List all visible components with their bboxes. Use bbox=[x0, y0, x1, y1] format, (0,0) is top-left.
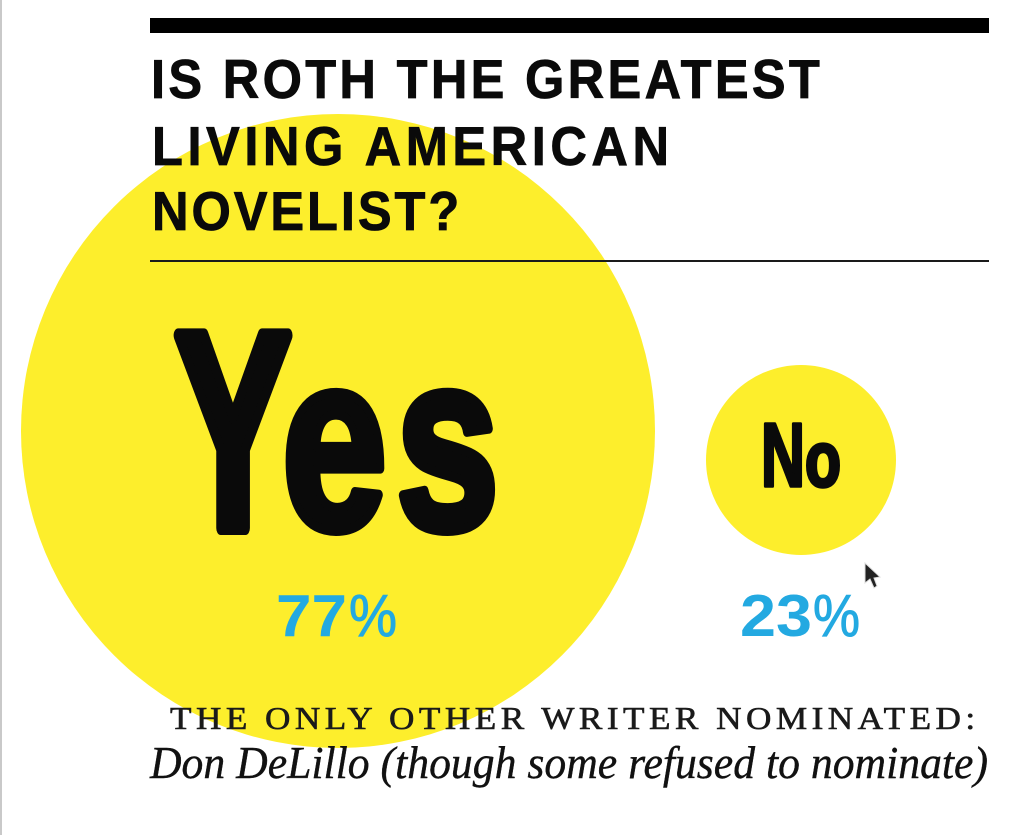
label: Yes: e bbox=[282, 302, 387, 582]
value: 77%: 77 bbox=[276, 583, 347, 649]
footnote bbox=[149, 701, 988, 788]
label: No: o bbox=[805, 415, 841, 503]
value: 77% bbox=[276, 583, 397, 649]
circle: No proportion bbox=[706, 365, 896, 555]
thin divider rule bbox=[150, 260, 989, 262]
label: Yes: Y bbox=[175, 276, 291, 588]
title: NOVELIST? bbox=[152, 181, 459, 242]
label: Yes: s bbox=[396, 302, 499, 582]
footnote: Don DeLillo (though some refused to nominate) bbox=[149, 737, 988, 788]
title: LIVING AMERICAN bbox=[152, 116, 669, 177]
value: 77%: % bbox=[349, 583, 397, 649]
label: Yes bbox=[175, 276, 499, 588]
value: 23% bbox=[740, 583, 860, 649]
title bbox=[151, 49, 820, 242]
value: 23%: 23 bbox=[740, 583, 812, 649]
circle: Yes proportion bbox=[21, 114, 655, 748]
value: 23%: % bbox=[813, 583, 860, 649]
icon: mouse cursor bbox=[865, 563, 880, 588]
label: No: N bbox=[761, 406, 805, 506]
top heavy rule bbox=[150, 18, 989, 33]
title: IS ROTH THE GREATEST bbox=[151, 49, 820, 110]
footnote: THE ONLY OTHER WRITER NOMINATED: bbox=[170, 701, 975, 737]
